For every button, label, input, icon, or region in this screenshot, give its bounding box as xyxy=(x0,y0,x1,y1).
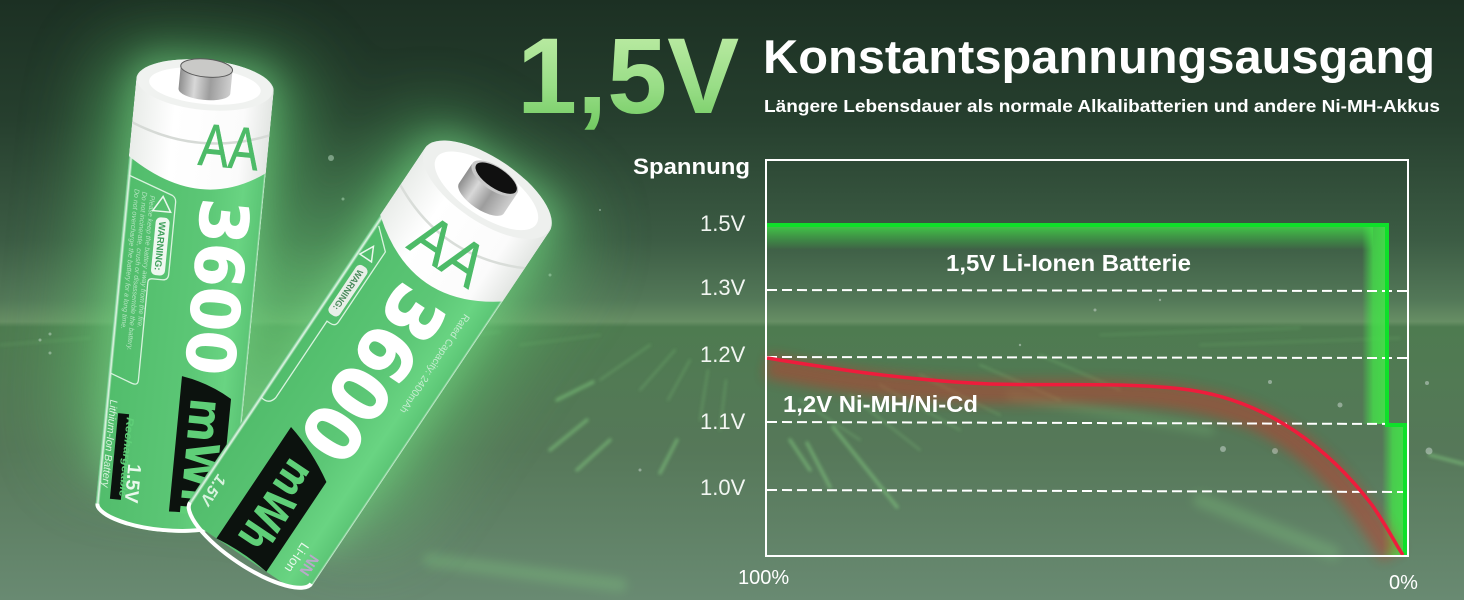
label: 1.5V: 1.5V xyxy=(196,471,229,509)
label: Rechargeable xyxy=(110,413,136,501)
x axis start: 100% xyxy=(738,567,789,589)
green line glow xyxy=(767,226,1406,555)
y axis labels: 1.0V xyxy=(700,475,746,500)
text: 3600: 3600 xyxy=(282,269,463,478)
top cap face xyxy=(408,122,566,258)
battery: left AA xyxy=(93,49,277,540)
body of right battery xyxy=(186,140,552,590)
title: 1,5V: 1,5V xyxy=(517,15,739,136)
battery: right AA xyxy=(186,140,552,590)
label: mWh black box: mWh xyxy=(169,396,234,521)
background: light streaks and particles xyxy=(0,155,1464,585)
battery glow xyxy=(68,46,591,567)
text: Rated Capacity: Rated Capacity: 2400mAh xyxy=(397,312,471,415)
top cap face xyxy=(135,54,275,116)
warning triangle xyxy=(358,245,374,264)
warning body text xyxy=(121,189,155,350)
warning label outline xyxy=(261,226,386,402)
y axis labels: 1.2V xyxy=(700,342,746,367)
label: Ni-MH: 1,2V Ni-MH/Ni-Cd xyxy=(783,391,978,417)
chart frame xyxy=(766,160,1408,556)
warning label outline xyxy=(109,175,178,386)
label: Li-Ion: Li-Ion xyxy=(282,540,312,575)
text: 3600: 3600 xyxy=(169,196,263,378)
cap inner ring xyxy=(147,63,262,109)
gridlines xyxy=(767,290,1407,492)
label: Lithium-Ion Battery: Lithium-Ion Battery xyxy=(99,399,119,489)
y axis labels: 1.1V xyxy=(700,409,746,434)
red line glow xyxy=(767,366,1392,555)
heading: Konstantspannungsausgang xyxy=(763,30,1435,83)
label: mWh black box: mWh xyxy=(227,450,324,560)
warning body text: Do not incinerate, crush or disassemble the battery. xyxy=(125,191,147,351)
text: AA: AA xyxy=(196,111,262,183)
y axis labels: 1.5V xyxy=(700,211,746,236)
body of left battery xyxy=(93,49,277,540)
terminal nub xyxy=(178,57,233,102)
y axis labels: 1.3V xyxy=(700,275,746,300)
warning pill: WARNING: xyxy=(152,221,167,271)
1,2V red line xyxy=(767,358,1403,555)
label: Rechargeable: Rechargeable xyxy=(116,417,136,498)
warning pill xyxy=(151,217,170,276)
warning body text: Do not overcharge the battery for a long time. xyxy=(119,189,140,329)
label: 1.5V: 1.5V xyxy=(120,463,144,504)
label: Li-Ion: 1,5V Li-Ionen Batterie xyxy=(946,250,1191,276)
1,5V green line xyxy=(767,225,1405,556)
y axis labels xyxy=(700,211,746,500)
terminal nub xyxy=(453,153,524,222)
cap inner ring xyxy=(423,137,550,245)
chart: voltage discharge curves xyxy=(633,154,1418,594)
y axis title: Spannung xyxy=(633,154,750,179)
subheading: Längere Lebensdauer als normale Alkalibatterien und andere Ni-MH-Akkus xyxy=(764,96,1440,116)
text: AA: AA xyxy=(398,202,500,301)
warning body text: Please keep the battery away from the fire. xyxy=(135,195,155,328)
warning triangle xyxy=(153,196,172,212)
x axis end: 0% xyxy=(1389,572,1418,594)
label: Ni-MH mark: NN xyxy=(296,551,322,579)
warning pill: WARNING: xyxy=(331,268,365,312)
